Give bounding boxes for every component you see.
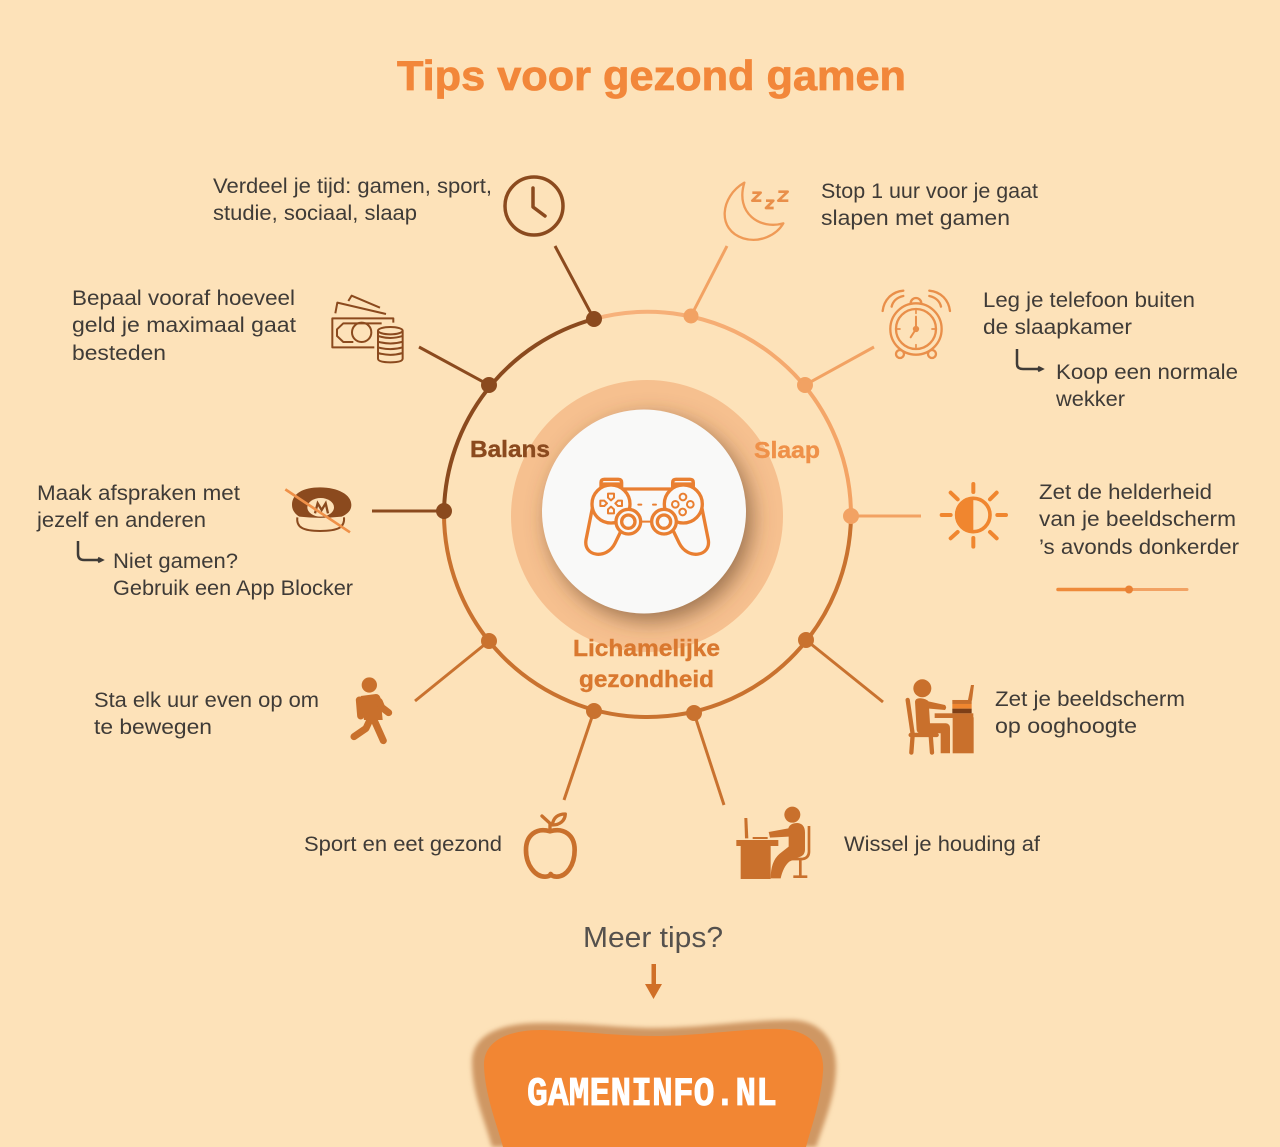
text: helderheid: ’s avonds donkerder [1039, 536, 1239, 559]
icon: person at desk [736, 807, 809, 879]
text: telefoon: de slaapkamer [983, 316, 1132, 339]
text: maak afspraken [36, 482, 240, 532]
icon: walking person [354, 677, 389, 741]
text: meer tips: Meer tips? [583, 922, 723, 954]
text: maak afspraken: jezelf en anderen [36, 509, 206, 532]
text: maak afspraken: Maak afspraken met [37, 482, 240, 505]
text: bepaal vooraf: geld je maximaal gaat [72, 314, 296, 337]
text: sta elk uur [94, 689, 319, 739]
connectors and dots: slaap [685, 246, 921, 522]
text: bepaal vooraf [72, 287, 296, 365]
text: verdeel je tijd: studie, sociaal, slaap [213, 202, 417, 225]
button: gameninfo.nl [472, 1020, 836, 1147]
text: telefoon [983, 289, 1195, 339]
text: verdeel je tijd: Verdeel je tijd: gamen, sport, [213, 175, 492, 198]
text: bepaal vooraf: Bepaal vooraf hoeveel [72, 287, 295, 310]
heading: Balans: Balans [470, 436, 550, 462]
text: verdeel je tijd [213, 175, 492, 225]
central halo [511, 380, 783, 652]
text: beeldscherm [995, 688, 1185, 738]
icon: mario cap crossed out [285, 487, 351, 532]
text: helderheid: Zet de helderheid [1039, 481, 1212, 504]
text: telefoon: Leg je telefoon buiten [983, 289, 1195, 312]
icon: moon with zzz [725, 183, 788, 240]
heading: Lichamelijke gezondheid: Lichamelijke [573, 635, 720, 661]
text: beeldscherm: op ooghoogte [995, 715, 1137, 738]
icon: clock [505, 177, 563, 235]
text: stop 1 uur: Stop 1 uur voor je gaat [821, 180, 1038, 203]
icon: money and coins [332, 296, 403, 362]
text: sta elk uur: Sta elk uur even op om [94, 689, 319, 712]
text: sta elk uur: te bewegen [94, 716, 212, 739]
title: Tips voor gezond gamen [397, 52, 906, 99]
heading: Slaap: Slaap [754, 437, 820, 463]
text: stop 1 uur: slapen met gamen [821, 207, 1010, 230]
heading: Lichamelijke gezondheid: gezondheid [579, 666, 714, 692]
text: stop 1 uur [821, 180, 1038, 230]
central disc shadow [548, 417, 752, 621]
icon: brightness sun [942, 484, 1006, 547]
connectors and dots: balans [372, 246, 600, 518]
text: helderheid [1039, 481, 1239, 559]
text: wekker [1055, 361, 1238, 411]
arrow: bent right [1017, 349, 1042, 371]
text: wekker: wekker [1055, 388, 1125, 411]
icon: alarm clock [883, 291, 950, 358]
text: niet gamen [113, 550, 353, 600]
text: wekker: Koop een normale [1056, 361, 1238, 384]
ring: slaap arc [594, 312, 851, 516]
central white disc [542, 410, 746, 614]
arrow: bent left [78, 541, 102, 562]
text: houding: Wissel je houding af [844, 833, 1040, 856]
brightness slider [1058, 586, 1187, 594]
icon: game controller [586, 479, 709, 554]
text: helderheid: van je beeldscherm [1039, 508, 1236, 531]
logo text: GAMENINFO.NL [527, 1072, 777, 1118]
text: bepaal vooraf: besteden [72, 342, 166, 365]
connectors and dots: lichamelijke gezondheid [415, 634, 883, 805]
heading: Lichamelijke gezondheid [573, 635, 720, 692]
ring: balans arc [444, 319, 594, 511]
text: beeldscherm: Zet je beeldscherm [995, 688, 1185, 711]
text: sport en eet: Sport en eet gezond [304, 833, 502, 856]
icon: apple [526, 814, 575, 877]
text: niet gamen: Niet gamen? [113, 550, 238, 573]
icon: person at desk with raised screen [908, 679, 974, 753]
text: niet gamen: Gebruik een App Blocker [113, 577, 353, 600]
ring: lichamelijke gezondheid arc [444, 511, 851, 717]
arrow: down [645, 964, 662, 999]
